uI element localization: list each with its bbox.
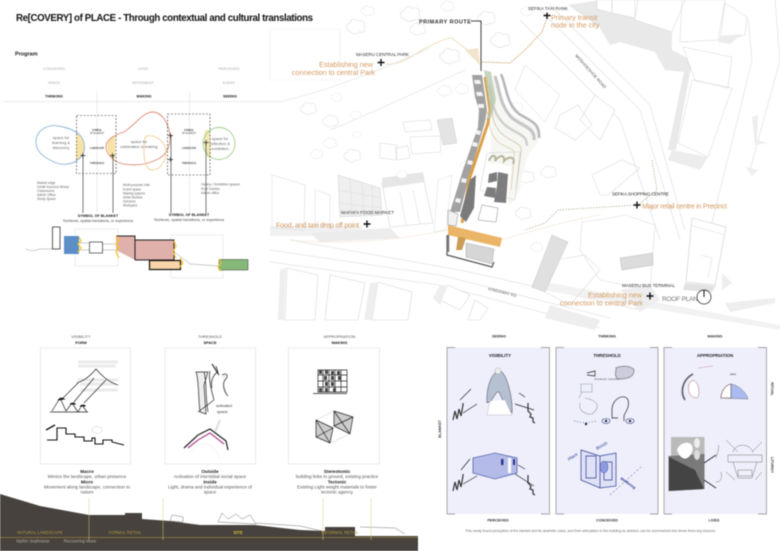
panel: visibility form: VISIBILITY <box>71 334 91 339</box>
label: Sefika Shopping Centre: SEFIKA SHOPPING CENTRE <box>612 192 669 196</box>
column headers <box>43 67 240 98</box>
title: Re[COVERY] of PLACE - Through contextual and cultural translations <box>16 13 313 24</box>
callout: symbol of blanket left: SYMBOL OF BLANKET <box>78 214 119 218</box>
program bubble diagram: space for <box>53 135 70 140</box>
sketch: threshold building <box>567 440 642 495</box>
program bubble diagram: SYMBOL <box>92 130 103 132</box>
label: Maseru Bus Terminal: MASERU BUS TERMINAL <box>622 283 675 288</box>
column headers: SPACE <box>48 81 61 85</box>
panel: appropriation making: APPROPRIATION <box>324 334 356 339</box>
program list: making <box>123 183 150 208</box>
sketch: threshold forms: space <box>217 409 228 414</box>
section drawing strip: INFORMAL RETAIL <box>322 530 359 535</box>
sketch: threshold thinking icons: threshold / transition <box>594 377 620 381</box>
text: outside inside: space <box>204 490 217 494</box>
text: outside inside: Light, drama and individual experience of <box>168 484 253 490</box>
heading: primary route with leader: PRIMARY ROUTE <box>419 20 471 26</box>
map: trees <box>300 1 556 252</box>
program bubble diagram: celebration & making <box>120 144 158 149</box>
label: Kingsway Road: KINGSWAY RD <box>488 286 517 298</box>
program list: learning: Market edge <box>37 181 55 185</box>
program list: reflection: Admin office <box>201 191 219 195</box>
program list: reflection <box>201 182 240 195</box>
callout: symbol of blanket right: SYMBOL OF BLANKET <box>169 213 210 217</box>
program list: reflection: Roof Garden <box>201 187 220 191</box>
program list: making: Multi-purpose Hall <box>123 183 150 187</box>
program bubble diagram: exhibition <box>212 146 228 151</box>
panel: visibility form <box>40 334 130 494</box>
program list: learning: Admin Office <box>37 193 56 197</box>
program bubble diagram <box>36 112 235 213</box>
program bubble diagram: SYMBOL <box>184 130 195 132</box>
sketch: stacked structure <box>726 440 762 480</box>
panel: making appropriation: LIVED <box>709 518 720 522</box>
text: outside inside <box>168 469 253 494</box>
column headers: LIVED <box>138 67 149 71</box>
side labels <box>438 382 774 474</box>
label: Maseru Bus Terminal: Establishing new <box>588 290 643 300</box>
sketch: threshold thinking icons <box>574 366 634 425</box>
text: macro micro: Mimics the landscape, urban presence <box>48 474 127 479</box>
column headers: MAKING <box>137 94 152 98</box>
column headers: EVENT <box>223 81 236 85</box>
program bubble diagram: THRESHOLD <box>182 163 196 165</box>
panel: seeing visibility <box>447 334 550 522</box>
panel: thinking threshold: THRESHOLD <box>593 353 621 358</box>
panel: thinking threshold <box>556 334 658 522</box>
program list: learning: Small resource library <box>37 185 69 189</box>
sketch: tectonic frames <box>316 411 353 443</box>
panel: visibility form: FORM <box>75 340 87 345</box>
program list: reflection: Gallery / Exhibition spaces <box>201 182 240 186</box>
program bubble diagram: space for <box>131 139 148 144</box>
sketch: threshold building: Place <box>567 451 579 462</box>
label: roof plan with north point: ROOF PLAN <box>662 296 698 303</box>
panel: seeing visibility: SEEING <box>492 334 506 338</box>
section drawing strip <box>0 494 418 551</box>
label: Moshoeshoe Road: MOSHOESHOE ROAD <box>574 53 607 89</box>
column headers: CONCEIVED <box>43 67 65 71</box>
panel: appropriation making: MAKING <box>332 340 347 345</box>
label: Sefika Shopping Centre <box>612 192 727 210</box>
label: Maseru Central Park: Establishing new <box>319 60 374 69</box>
program list: making: Making spaces <box>123 192 145 196</box>
text: outside inside: Inside <box>203 480 217 484</box>
section drawing strip: FORMAL RETAIL <box>109 530 142 535</box>
text: stereotomic tectonic: building links to ground, existing practice <box>296 474 379 479</box>
panel: making appropriation: MAKING <box>708 334 723 338</box>
program list: making: Services <box>123 200 136 204</box>
label: Maseru Central Park <box>292 52 410 77</box>
program bubble diagram: LANDSCAPE <box>90 147 105 150</box>
program list: learning: Study Space <box>37 197 56 201</box>
sketch: cloak figure <box>487 368 512 415</box>
label: Mafafa Food Market: MAFAFA FOOD MARKET <box>341 210 394 215</box>
site plan map <box>270 0 780 330</box>
section drawing strip: NATURAL LANDSCAPE <box>17 530 63 535</box>
callout: symbol of blanket right: Techtonic, spatial transitions, or experience <box>154 218 224 222</box>
program bubble diagram: discovery <box>53 145 69 150</box>
panel: appropriation making <box>288 334 380 494</box>
label: Sefika Taxi Rank: Primary transit <box>551 13 597 22</box>
column headers: THINKING <box>45 94 63 98</box>
label: Maseru Central Park: connection to central Park <box>292 68 375 77</box>
sketch: threshold forms: activated <box>216 403 232 408</box>
section drawing strip: Mythic Sephetese <box>16 538 50 544</box>
map: pale background roads and parcels <box>270 0 780 330</box>
sketch: stepped section <box>46 425 124 445</box>
label: Maseru Bus Terminal: connection to central Park <box>560 298 643 308</box>
text: macro micro <box>44 469 130 494</box>
map: proposed building <box>447 70 539 267</box>
panel: making appropriation <box>664 334 766 522</box>
program list: making: Workyard <box>123 204 137 208</box>
side labels: RITUAL <box>770 382 774 397</box>
program list: making: Artist Studios <box>123 196 143 200</box>
sketch: appropriation forms <box>682 366 748 400</box>
sketch: stereotomic grid <box>313 370 347 394</box>
label: Sefika Taxi Rank: SEFIKA TAXI RANK <box>528 6 569 11</box>
panel: threshold space: THRESHOLD <box>198 334 222 339</box>
text: outside inside: Activation of interstitial social space <box>174 474 247 479</box>
side labels: LITURGY <box>770 457 774 474</box>
sketch: roof and mountains <box>50 362 118 412</box>
label: Maseru Central Park: MASERU CENTRAL PARK <box>356 52 410 57</box>
text: stereotomic tectonic: Stereotomic <box>324 469 351 474</box>
program bubble diagram: LANDSCAPE <box>182 147 197 150</box>
section diagram of program <box>26 227 248 278</box>
map: access routes <box>290 18 657 242</box>
column headers: PERCEIVED <box>218 67 240 71</box>
column headers: SEEING <box>223 94 237 98</box>
sketch: threshold building: Bonds <box>595 440 609 451</box>
panel: thinking threshold: CONCEIVED <box>596 518 618 522</box>
panel: thinking threshold: THINKING <box>598 334 616 338</box>
caption: This newly found perception of the blanket and its aesthetic value, and their articulation in the building as artefact, can be summarized into these three key lessons. <box>465 529 716 533</box>
text: macro micro: Micro <box>81 480 93 484</box>
callout: symbol of blanket left <box>63 214 133 223</box>
callout: symbol of blanket right <box>154 213 224 222</box>
side labels: BLANKET <box>438 419 442 438</box>
section drawing strip: Recovering Muse <box>64 538 97 544</box>
panel: making appropriation: APPROPRIATION <box>697 353 733 358</box>
heading: primary route with leader <box>419 20 481 71</box>
label: Maseru Bus Terminal <box>560 283 675 308</box>
program bubble diagram: THRESHOLD <box>90 163 104 165</box>
text: stereotomic tectonic: tectonic agency <box>321 490 354 494</box>
panel: threshold space: SPACE <box>203 340 217 345</box>
sketch: threshold building: Wellbeing <box>619 477 637 490</box>
program bubble diagram: learning & <box>52 140 70 145</box>
program bubble diagram: OF BLANKET <box>90 132 105 135</box>
callout: symbol of blanket left: Techtonic, spatial transitions, or experience <box>63 219 133 223</box>
heading: program: Program <box>15 52 38 58</box>
sketch: appropriation forms: place <box>730 372 737 376</box>
text: macro micro: Macro <box>80 469 94 474</box>
label: Sefika Taxi Rank <box>528 6 600 30</box>
label: Mafafa Food Market <box>276 210 394 230</box>
program bubble diagram: OF BLANKET <box>182 132 197 135</box>
panel: seeing visibility: PERCEIVED <box>487 518 509 522</box>
panel: program <box>3 52 283 278</box>
photo: grayscale collage <box>668 437 721 491</box>
sketch: hatched building <box>473 453 517 479</box>
sketch: roof arc <box>184 420 228 460</box>
label: Sefika Shopping Centre: Major retail centre in Precinct <box>642 202 727 210</box>
program bubble diagram: reflection & <box>210 141 230 146</box>
text: macro micro: Movement along landscape, connection to <box>44 484 130 490</box>
sketch: threshold forms <box>196 364 232 414</box>
label: Sefika Taxi Rank: node in the city <box>551 20 600 30</box>
text: stereotomic tectonic: Existing Light weight materials to foster <box>297 484 377 490</box>
program list: making: Event space <box>123 188 141 192</box>
label: roof plan with north point <box>662 290 711 304</box>
sketch: viewers and arrows <box>453 389 535 495</box>
program list: learning <box>37 181 69 201</box>
text: macro micro: nature <box>80 490 94 494</box>
text: stereotomic tectonic: Tectonic <box>328 480 347 484</box>
program bubble diagram: space for <box>212 136 229 141</box>
panel: threshold space <box>165 334 256 494</box>
column headers: MOVEMENT <box>132 81 154 85</box>
program list: learning: Classrooms <box>37 189 55 193</box>
map: surrounding buildings <box>272 65 775 330</box>
panel: seeing visibility: VISIBILITY <box>489 353 511 358</box>
text: outside inside: Outside <box>201 469 219 474</box>
label: Mafafa Food Market: Food, and taxi drop off point <box>276 220 359 230</box>
text: stereotomic tectonic <box>296 469 379 494</box>
section drawing strip: SITE <box>233 530 243 535</box>
